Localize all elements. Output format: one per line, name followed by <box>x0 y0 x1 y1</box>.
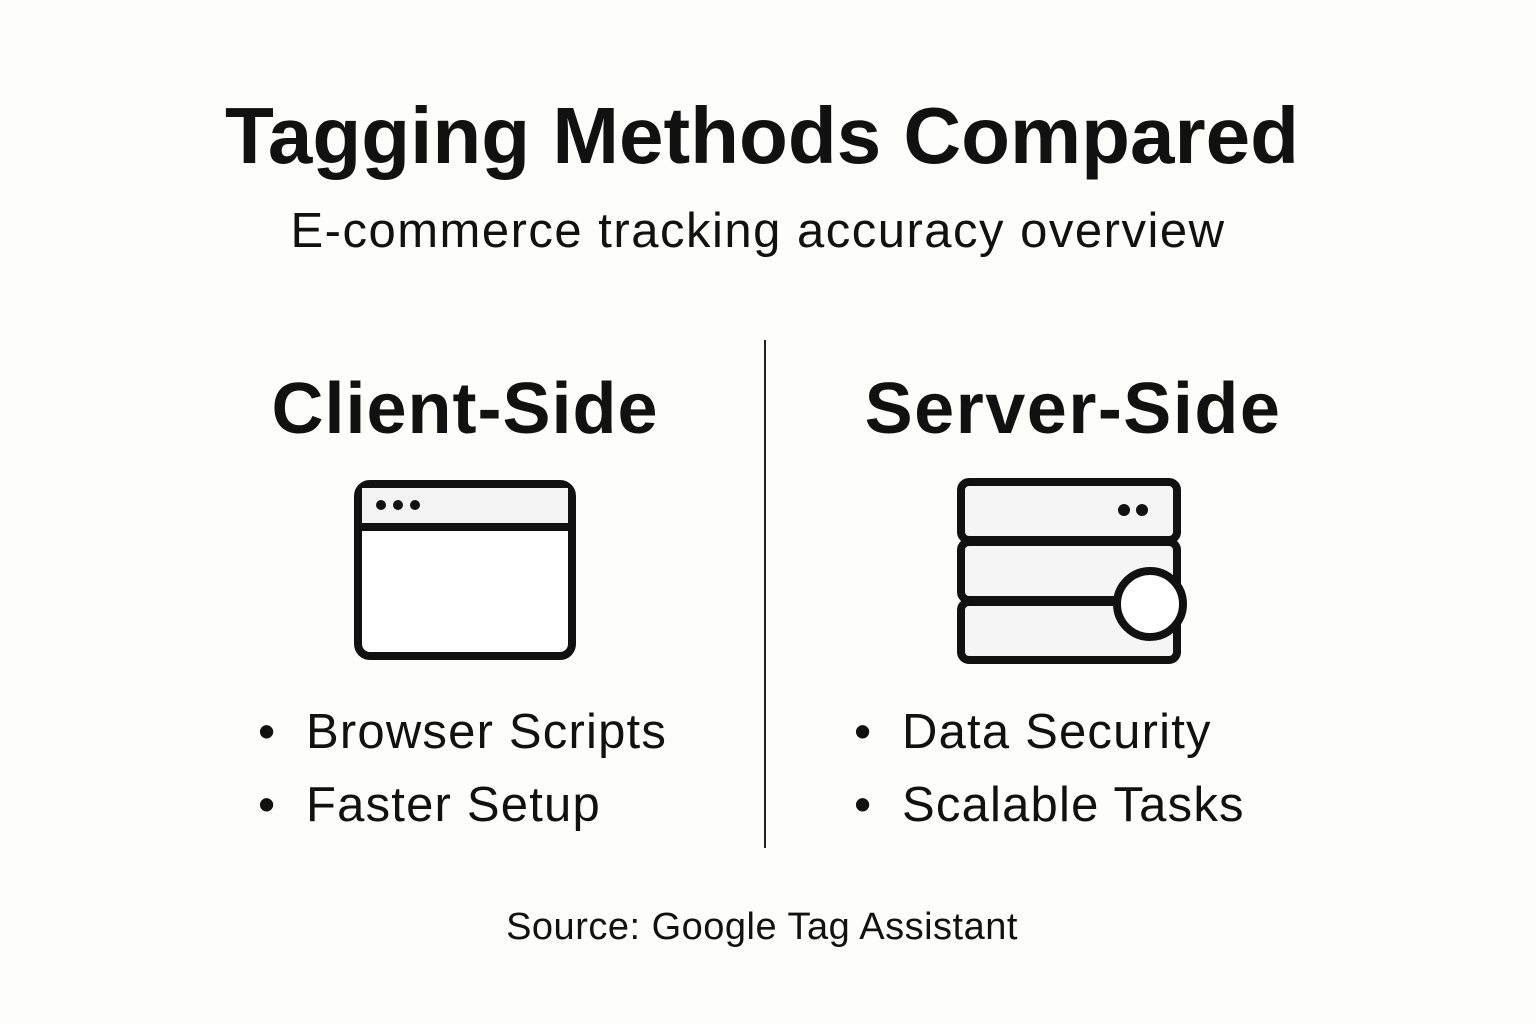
bullet list: client-side <box>258 705 667 832</box>
source note: Source: Google Tag Assistant <box>506 906 1018 948</box>
title: Tagging Methods Compared <box>225 91 1299 180</box>
icon: browser window <box>354 480 576 660</box>
icon: server stack <box>957 478 1187 664</box>
heading: client-side: Client-Side <box>271 369 659 449</box>
bullet list: client-side: • Faster Setup <box>258 778 601 832</box>
divider <box>764 340 766 848</box>
bullet list: server-side: • Data Security <box>854 705 1212 759</box>
subtitle: E-commerce tracking accuracy overview <box>290 204 1226 258</box>
bullet list: client-side: • Browser Scripts <box>258 705 667 759</box>
panel: server-side <box>854 369 1281 832</box>
bullet list: server-side <box>854 705 1245 832</box>
bullet list: server-side: • Scalable Tasks <box>854 778 1245 832</box>
heading: server-side: Server-Side <box>865 369 1281 449</box>
panel: client-side <box>258 369 667 832</box>
